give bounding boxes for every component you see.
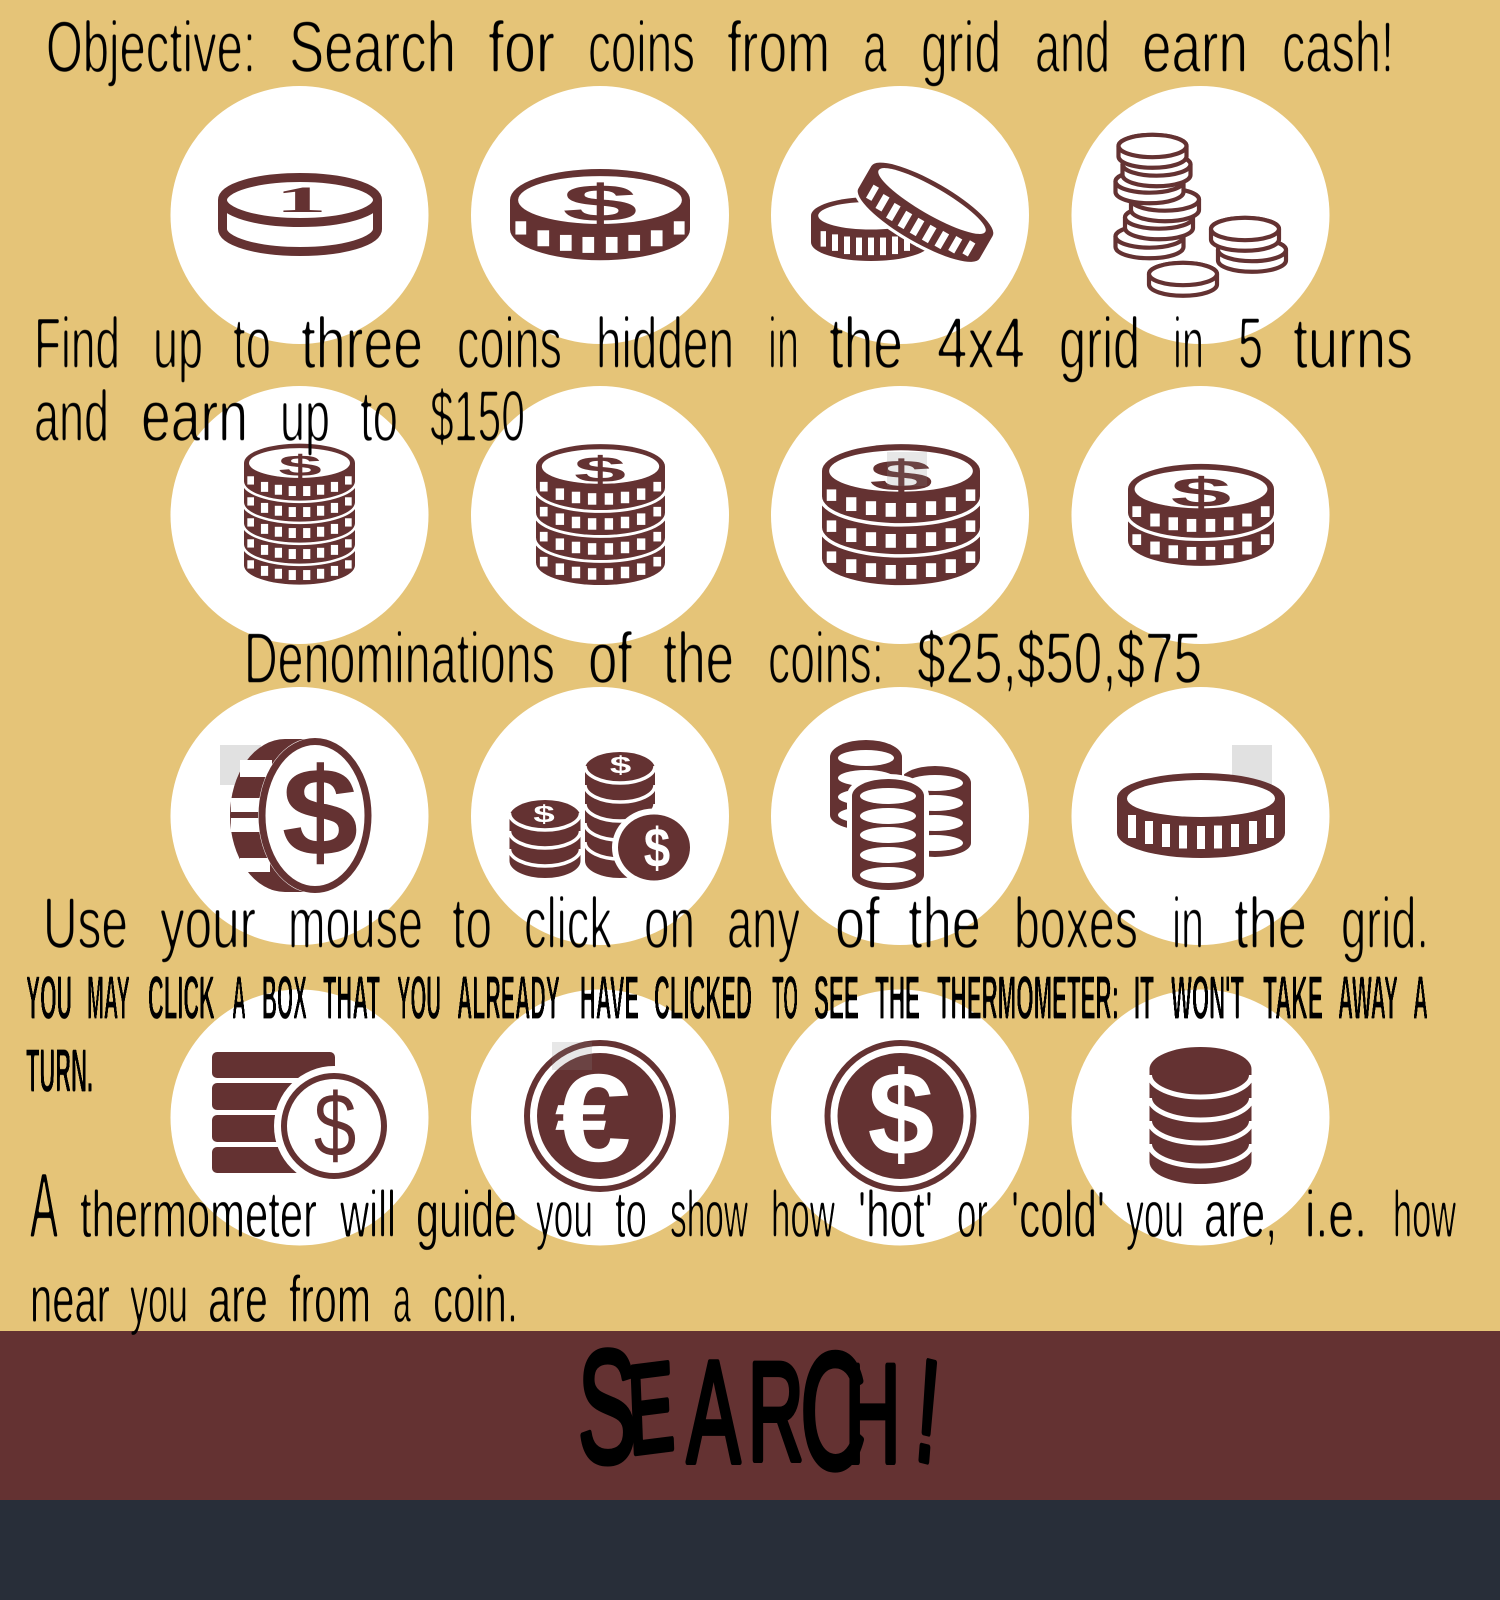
- coin disc: one coin: [170, 86, 428, 344]
- coin disc: stack of four: [471, 386, 729, 644]
- instruction: thermometer guide: from: [289, 1262, 371, 1336]
- text: A: [1413, 964, 1428, 1033]
- instruction: use your mouse: Use: [43, 884, 128, 964]
- instruction: find coins: up: [280, 377, 330, 457]
- instruction: denominations: the: [663, 619, 734, 699]
- objective heading: a: [863, 8, 888, 88]
- coin disc: stacks with dollar coin: $: [610, 751, 631, 778]
- instruction: find coins: [34, 304, 1413, 457]
- objective heading: and: [1035, 8, 1110, 88]
- coin disc: two tilted coins: [771, 86, 1029, 344]
- coin disc: stack of two: [1072, 386, 1330, 644]
- instruction: use your mouse: boxes: [1014, 884, 1138, 964]
- instruction: find coins: coins: [457, 304, 562, 384]
- instruction: denominations: [244, 619, 1202, 699]
- coin disc: big side-on dollar coin: [170, 687, 428, 945]
- objective heading: cash!: [1282, 8, 1394, 88]
- instruction: thermometer guide: near: [30, 1262, 110, 1336]
- band: footer: [0, 1500, 1500, 1600]
- search button label: H: [845, 1336, 900, 1492]
- instruction: capitals note: MAY: [87, 964, 130, 1033]
- instruction: use your mouse: to: [452, 884, 492, 964]
- instruction: find coins: to: [233, 304, 271, 384]
- instruction: thermometer guide: A: [30, 1155, 58, 1257]
- objective heading: Search: [289, 8, 456, 88]
- instruction: use your mouse: on: [644, 884, 695, 964]
- instruction: find coins: earn: [141, 377, 248, 457]
- instruction: capitals note: WON'T: [1171, 964, 1244, 1033]
- instruction: capitals note: CLICKED: [654, 964, 752, 1033]
- instruction: use your mouse: the: [1234, 884, 1307, 964]
- instruction: thermometer guide: i.e.: [1305, 1177, 1367, 1251]
- objective heading: Objective:: [46, 8, 256, 88]
- instruction: find coins: to: [360, 377, 398, 457]
- instruction: capitals note: CLICK: [148, 964, 215, 1033]
- coin disc: stacks with dollar coin: $: [533, 800, 555, 827]
- instruction: capitals note: [26, 964, 1428, 1106]
- instruction: capitals note: THE: [875, 964, 920, 1033]
- instruction: capitals note: SEE: [814, 964, 859, 1033]
- instruction: use your mouse: any: [727, 884, 800, 964]
- instruction: use your mouse: the: [908, 884, 981, 964]
- instruction: denominations: coins:: [768, 619, 884, 699]
- instruction: find coins: in: [1173, 304, 1204, 384]
- instruction: capitals note: TO: [772, 964, 798, 1033]
- instruction: thermometer guide: show: [670, 1177, 748, 1251]
- instruction: capitals note: TURN.: [26, 1037, 93, 1106]
- coin disc: dollar coin: $: [562, 174, 638, 232]
- instruction: use your mouse: of: [835, 884, 881, 964]
- instruction: thermometer guide: [30, 1155, 1456, 1336]
- instruction: thermometer guide: will: [339, 1177, 396, 1251]
- coin disc: stacks with dollar coin: [471, 687, 729, 945]
- instruction: thermometer guide: to: [615, 1177, 647, 1251]
- instruction: use your mouse: mouse: [288, 884, 423, 964]
- instruction: thermometer guide: thermometer: [80, 1177, 317, 1251]
- instruction: use your mouse: grid.: [1341, 884, 1429, 964]
- instruction: use your mouse: your: [160, 884, 256, 964]
- coin disc: stacks with dollar coin: $: [644, 817, 670, 880]
- instruction: find coins: in: [768, 304, 799, 384]
- coin disc: round dollar coin: [771, 990, 1029, 1246]
- coin disc: stack of two: $: [1171, 469, 1231, 516]
- instruction: denominations: Denominations: [244, 619, 555, 699]
- instruction: capitals note: THERMOMETER:: [937, 964, 1119, 1033]
- objective heading: earn: [1142, 8, 1248, 88]
- coin disc: bars with outline dollar coin: [170, 990, 428, 1246]
- search button label: R: [748, 1334, 804, 1490]
- instruction: thermometer guide: you: [1126, 1177, 1184, 1251]
- instruction: find coins: up: [153, 304, 203, 384]
- instruction: capitals note: BOX: [262, 964, 307, 1033]
- instruction: thermometer guide: how: [771, 1177, 835, 1251]
- coin disc: euro coin: [471, 990, 729, 1246]
- coin disc: scattered outline coins: [1072, 86, 1330, 344]
- instruction: use your mouse: [43, 884, 1429, 964]
- instruction: denominations: $25,$50,$75: [917, 619, 1202, 699]
- instruction: denominations: of: [588, 619, 633, 699]
- instruction: capitals note: IT: [1134, 964, 1154, 1033]
- instruction: find coins: 5: [1238, 304, 1263, 384]
- search button label: C: [800, 1319, 866, 1504]
- coin disc: one coin: 1: [275, 179, 327, 220]
- instruction: thermometer guide: are,: [1204, 1177, 1277, 1251]
- instruction: capitals note: ALREADY: [457, 964, 560, 1033]
- instruction: capitals note: THAT: [323, 964, 380, 1033]
- objective heading: coins: [588, 8, 695, 88]
- coin disc: solid coin stack: [1072, 990, 1330, 1246]
- instruction: thermometer guide: guide: [416, 1177, 517, 1251]
- coin disc: dollar coin: [471, 86, 729, 344]
- objective heading: from: [727, 8, 830, 88]
- instruction: thermometer guide: coin.: [433, 1262, 518, 1336]
- coin disc: round dollar coin: $: [868, 1047, 934, 1181]
- instruction: thermometer guide: are: [208, 1262, 268, 1336]
- objective heading: [46, 8, 1394, 88]
- instruction: find coins: grid: [1059, 304, 1140, 384]
- coin disc: bars with outline dollar coin: $: [314, 1074, 356, 1175]
- coin disc: three outline stacks: [771, 687, 1029, 945]
- objective heading: for: [488, 8, 555, 88]
- search button label: E: [625, 1337, 677, 1481]
- instruction: find coins: 4x4: [937, 304, 1025, 384]
- instruction: use your mouse: click: [524, 884, 613, 964]
- instruction: find coins: hidden: [596, 304, 734, 384]
- instruction: thermometer guide: you: [130, 1262, 188, 1336]
- objective heading: grid: [921, 8, 1001, 88]
- search button label: !: [911, 1328, 945, 1494]
- coin disc: stack of five: $: [278, 449, 322, 483]
- instruction: thermometer guide: or: [957, 1177, 988, 1251]
- instruction: use your mouse: in: [1172, 884, 1204, 964]
- instruction: thermometer guide: a: [393, 1262, 411, 1336]
- coin disc: stack of three: $: [869, 452, 933, 501]
- instruction: capitals note: YOU: [26, 964, 72, 1033]
- band: search button: [0, 1331, 1500, 1500]
- coin disc: stack of five: [170, 386, 428, 644]
- coin disc: big side-on dollar coin: $: [282, 742, 358, 882]
- instruction: capitals note: YOU: [397, 964, 441, 1033]
- search button label: S: [578, 1318, 637, 1497]
- coin disc: single reeded coin: [1072, 687, 1330, 945]
- instruction: find coins: three: [301, 304, 423, 384]
- instruction: find coins: the: [829, 304, 903, 384]
- coin disc: stack of three: [771, 386, 1029, 644]
- instruction: capitals note: HAVE: [580, 964, 639, 1033]
- instruction: find coins: turns: [1293, 304, 1413, 384]
- search button label: A: [687, 1331, 740, 1493]
- instruction: capitals note: A: [232, 964, 246, 1033]
- instruction: thermometer guide: 'cold': [1011, 1177, 1105, 1251]
- instruction: thermometer guide: you: [536, 1177, 593, 1251]
- instruction: find coins: and: [34, 377, 109, 457]
- instruction: find coins: $150: [430, 377, 525, 457]
- coin disc: stack of four: $: [574, 450, 626, 490]
- instruction: find coins: Find: [34, 304, 120, 384]
- coin disc: euro coin: €: [555, 1048, 631, 1188]
- instruction: thermometer guide: 'hot': [858, 1177, 933, 1251]
- instruction: capitals note: TAKE: [1263, 964, 1323, 1033]
